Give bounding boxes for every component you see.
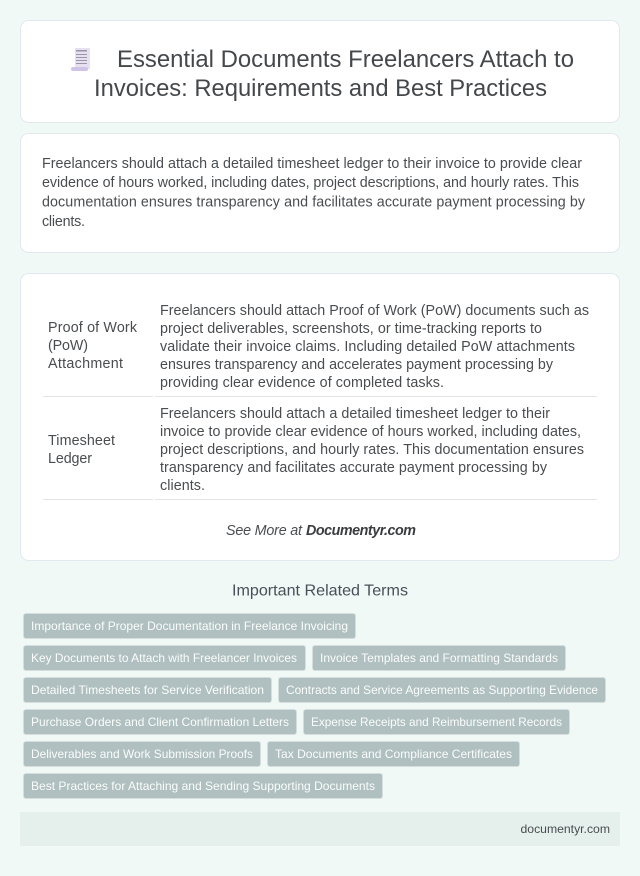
row text: timesheet ledger: transparency and facilitates accurate payment processing by [160, 460, 548, 476]
row text: proof of work: validate their invoice claims. Including detailed PoW attachments [160, 339, 575, 355]
row text: proof of work: ensures transparency and accelerates payment processing by [160, 357, 554, 373]
row label: timesheet ledger: Timesheet [48, 433, 115, 449]
title: Essential Documents Freelancers Attach to [117, 46, 574, 73]
tag [304, 710, 570, 734]
row: proof of work [48, 303, 589, 391]
footer bar [20, 812, 620, 846]
row text: timesheet ledger: invoice to provide clear evidence of hours worked, including dates, [160, 424, 581, 440]
row text: timesheet ledger: Freelancers should attach a detailed timesheet ledger to their [160, 406, 550, 422]
tag: Best Practices for Attaching and Sending Supporting Documents [31, 779, 375, 793]
tag: Purchase Orders and Client Confirmation Letters [31, 715, 289, 729]
footer text: documentyr.com [520, 822, 610, 836]
tag [24, 614, 356, 638]
tag [24, 710, 296, 734]
row label: proof of work: Proof of Work [48, 320, 138, 336]
tag: Importance of Proper Documentation in Freelance Invoicing [31, 619, 348, 633]
tag: Tax Documents and Compliance Certificates [275, 747, 512, 761]
tag: Deliverables and Work Submission Proofs [31, 747, 253, 761]
intro paragraph: documentation ensures transparency and facilitates accurate payment processing by [42, 194, 586, 210]
panel: document table card [20, 274, 620, 560]
intro paragraph: evidence of hours worked, including dates, project descriptions, and hourly rates. This [42, 175, 579, 191]
panel: intro text card [20, 134, 620, 252]
row text: proof of work: providing clear evidence of completed tasks. [160, 375, 444, 391]
intro paragraph: Freelancers should attach a detailed timesheet ledger to their invoice to provide clear [42, 156, 582, 172]
row text: timesheet ledger: project descriptions, and hourly rates. This documentation ensures [160, 442, 584, 458]
tag [24, 742, 260, 766]
panel: title card [20, 20, 620, 122]
tag: Detailed Timesheets for Service Verification [31, 683, 264, 697]
intro paragraph: clients. [42, 214, 85, 230]
tag: Key Documents to Attach with Freelancer Invoices [31, 651, 297, 665]
row label: timesheet ledger: Ledger [48, 451, 92, 467]
icon: ledger document [71, 48, 90, 71]
tag: Invoice Templates and Formatting Standards [320, 651, 558, 665]
title: Invoices: Requirements and Best Practices [94, 75, 547, 102]
row text: proof of work: project deliverables, screenshots, or time-tracking reports to [160, 321, 542, 337]
tag [24, 646, 306, 670]
tag [312, 646, 566, 670]
tag: Contracts and Service Agreements as Supporting Evidence [286, 683, 598, 697]
tag: Expense Receipts and Reimbursement Records [311, 715, 562, 729]
tag list [24, 614, 606, 798]
tag [24, 678, 272, 702]
row label: proof of work: Attachment [48, 356, 123, 372]
row text: proof of work: Freelancers should attach Proof of Work (PoW) documents such as [160, 303, 589, 319]
row: timesheet ledger [48, 406, 584, 494]
see more link: Documentyr.com [306, 523, 416, 539]
row label: proof of work: (PoW) [48, 338, 88, 354]
row text: timesheet ledger: clients. [160, 478, 205, 494]
tag [268, 742, 520, 766]
heading: important related terms: Important Related Terms [232, 582, 408, 600]
tag [24, 774, 382, 798]
tag [278, 678, 606, 702]
see more link: See More at [226, 523, 303, 539]
